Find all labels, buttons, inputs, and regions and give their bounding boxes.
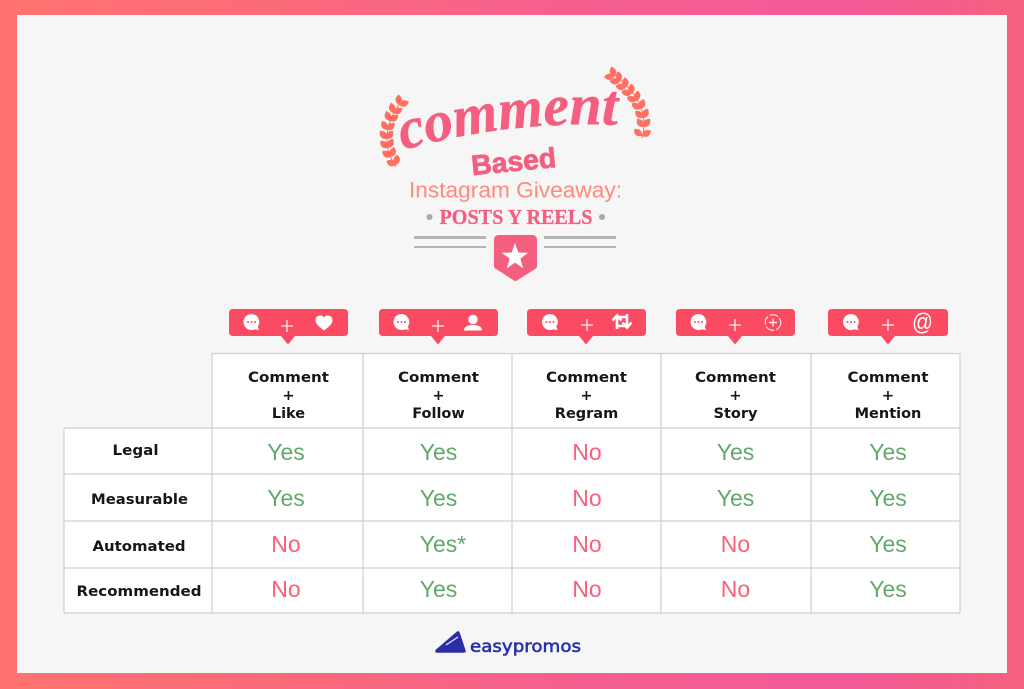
- row values: measurable: Yes: [869, 485, 907, 511]
- row values: legal: [267, 439, 907, 465]
- row values: measurable: Yes: [717, 485, 754, 511]
- icon: comment bubble: [542, 314, 558, 330]
- row values: measurable: Yes: [420, 485, 457, 511]
- icon: heart: [316, 316, 332, 330]
- icon badge: comment + like: [229, 309, 348, 344]
- plus: [729, 319, 741, 331]
- column header: comment + follow: Comment: [398, 370, 479, 386]
- column header: comment + follow: +: [432, 388, 445, 404]
- column header: comment + mention: Mention: [855, 406, 921, 422]
- subtitle: posts y reels: POSTS Y REELS: [440, 205, 592, 229]
- badge rules right: [544, 236, 616, 248]
- column header: comment + like: Comment: [248, 370, 329, 386]
- column header: comment + regram: Regram: [555, 406, 618, 422]
- column header: comment + follow: Follow: [412, 406, 465, 422]
- logo wordmark: easypromos: [470, 637, 581, 657]
- comparison table: [64, 353, 960, 613]
- table cell backgrounds: [64, 353, 960, 613]
- column header: comment + mention: +: [882, 388, 894, 404]
- row label: automated: Automated: [92, 539, 186, 555]
- row values: automated: Yes*: [420, 531, 466, 557]
- table grid: [64, 353, 960, 613]
- icon: left laurel: [377, 94, 410, 168]
- plus: [882, 319, 894, 331]
- column header: comment + like: +: [282, 388, 295, 404]
- row values: measurable: No: [572, 485, 602, 511]
- dot left: [426, 214, 432, 220]
- row values: automated: No: [271, 531, 301, 557]
- icon badge: comment + mention: [828, 309, 948, 344]
- column header: comment + like: Like: [272, 406, 305, 422]
- row values: legal: Yes: [420, 439, 457, 465]
- row values: recommended: Yes: [869, 576, 907, 602]
- icon badge: comment + regram: [527, 309, 646, 344]
- icon: story circle: [765, 315, 781, 330]
- row values: automated: [271, 531, 907, 557]
- row values: recommended: No: [572, 576, 602, 602]
- row values: automated: No: [572, 531, 602, 557]
- column header: comment + regram: +: [580, 388, 593, 404]
- icon: at sign: @: [912, 309, 933, 336]
- icon: person: [464, 315, 482, 330]
- column header: comment + story: Story: [714, 406, 758, 422]
- row values: measurable: [267, 485, 907, 511]
- row values: legal: Yes: [869, 439, 907, 465]
- plus: [281, 320, 293, 332]
- row values: legal: Yes: [717, 439, 754, 465]
- icon: comment bubble: [843, 314, 859, 330]
- subtitle: Instagram Giveaway: Instagram Giveaway:: [409, 178, 622, 202]
- icon: comment bubble: [691, 314, 706, 330]
- logo: easypromos: [437, 633, 581, 657]
- title: comment: comment: [400, 92, 620, 148]
- column header: comment + regram: Comment: [546, 370, 627, 386]
- row values: recommended: [271, 576, 907, 602]
- title: Based: Based: [470, 142, 557, 181]
- row values: recommended: Yes: [420, 576, 457, 602]
- row values: automated: No: [721, 531, 750, 557]
- badge rules left: [414, 236, 486, 248]
- column header: comment + story: Comment: [695, 370, 776, 386]
- plus: [432, 320, 444, 332]
- icon: comment bubble: [394, 314, 409, 330]
- row values: recommended: No: [721, 576, 750, 602]
- row values: legal: Yes: [267, 439, 305, 465]
- row label: recommended: Recommended: [76, 584, 202, 600]
- row values: recommended: No: [271, 576, 301, 602]
- row label: legal: Legal: [112, 443, 158, 459]
- icon: star shield badge: [494, 235, 537, 281]
- plus: [581, 319, 593, 331]
- icon badge: comment + story: [676, 309, 795, 344]
- dot right: [599, 214, 605, 220]
- row values: automated: Yes: [869, 531, 907, 557]
- icon: regram arrows: [612, 314, 632, 329]
- icon: comment bubble: [244, 314, 259, 330]
- row values: legal: No: [572, 439, 602, 465]
- column header: comment + mention: Comment: [848, 370, 929, 386]
- column header: comment + story: +: [729, 388, 742, 404]
- row label: measurable: Measurable: [91, 492, 188, 508]
- icon: easypromos mark: [437, 633, 464, 651]
- icon badge: comment + follow: [379, 309, 498, 344]
- icon: right laurel: [604, 66, 653, 139]
- row values: measurable: Yes: [267, 485, 305, 511]
